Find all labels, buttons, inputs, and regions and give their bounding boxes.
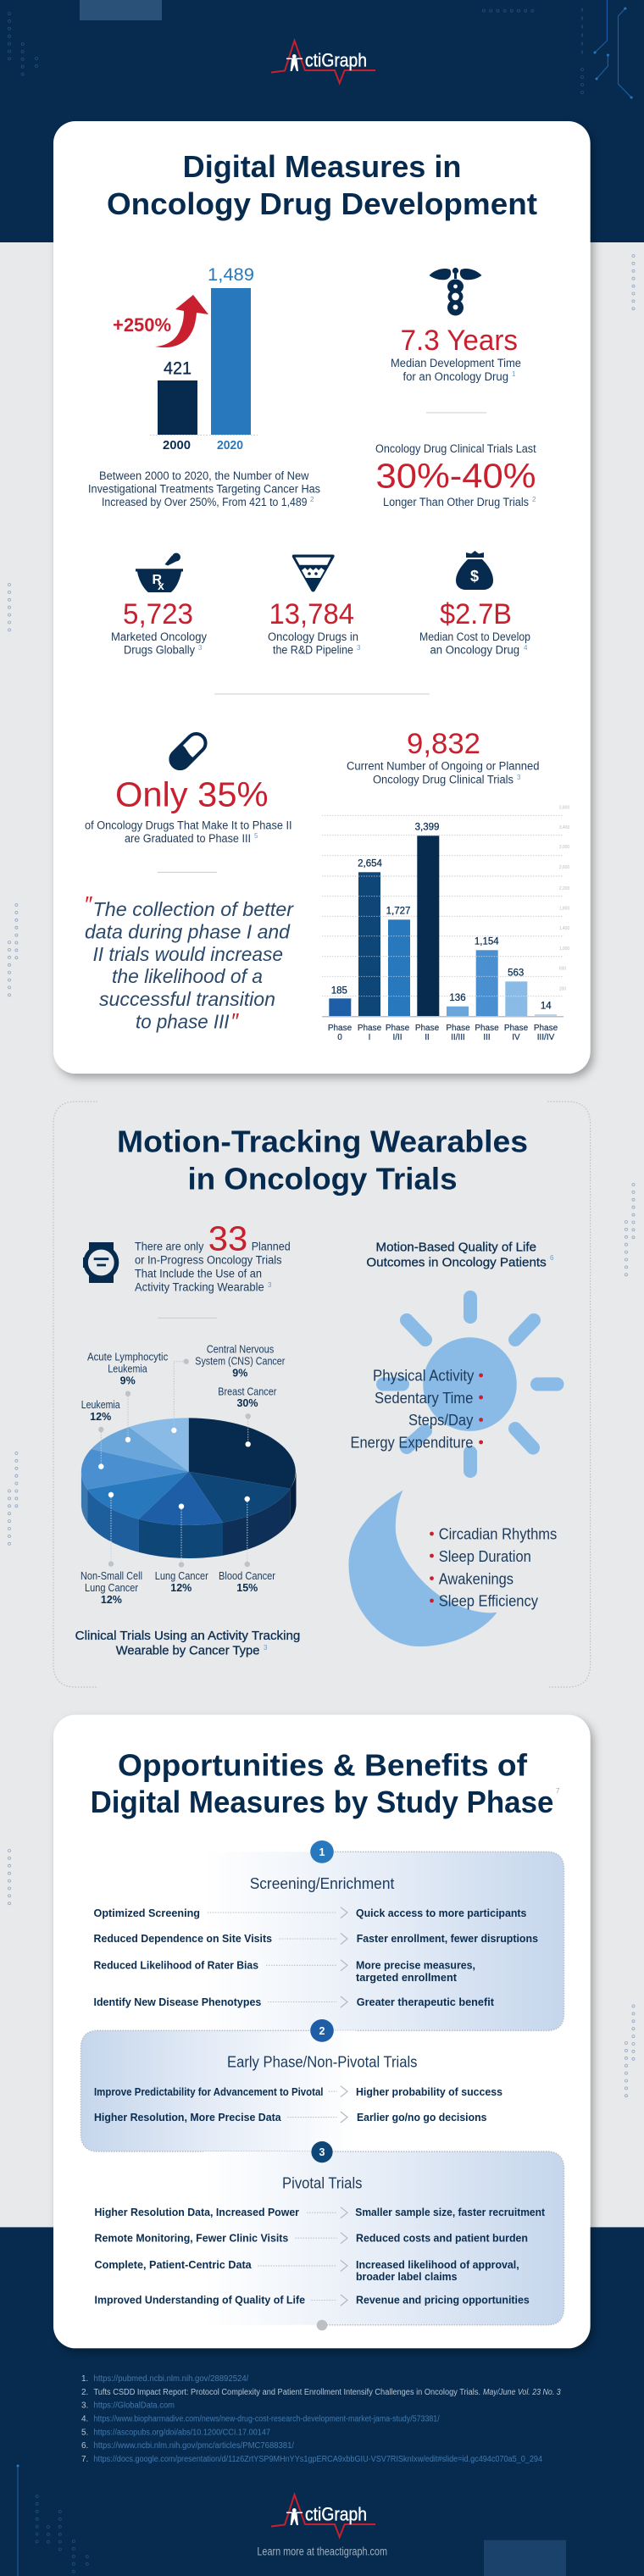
stat: 33 trials: That Include the Use of an	[135, 1268, 262, 1280]
stat: 7.3 years: for an Oncology Drug	[403, 370, 508, 383]
stat: R&D pipeline	[268, 598, 361, 656]
rows: pivotal benefits	[95, 2206, 546, 2306]
footer logo: ctiGraph	[305, 2504, 367, 2525]
stat: only 35%: Only 35%	[115, 774, 268, 813]
stat: 33 trials: Activity Tracking Wearable	[135, 1280, 264, 1293]
pie chart: cancer types: Leukemia	[108, 1363, 147, 1375]
list: daytime outcomes: Steps/Day	[408, 1411, 474, 1429]
list: sleep outcomes: Sleep Efficiency	[439, 1592, 539, 1610]
rows: pivotal benefits: Increased likelihood of approval,	[356, 2258, 519, 2271]
rows: screening benefits: Faster enrollment, fewer disruptions	[357, 1932, 538, 1945]
stat: only 35%: of Oncology Drugs That Make It to Phase II	[85, 819, 292, 831]
references: 2.	[81, 2388, 88, 2397]
pie chart: cancer types: Central Nervous	[207, 1344, 274, 1356]
chart caption: 3	[264, 1644, 268, 1652]
icon: wearable watch	[83, 1242, 117, 1283]
bar chart: trials by phase: 1,000	[559, 947, 569, 952]
bar chart: trials by phase: 563	[508, 969, 524, 979]
panel: pivotal trials	[95, 2141, 564, 2330]
bar chart: trials by phase: Phase	[446, 1024, 470, 1033]
pie chart: cancer types: 15%	[236, 1582, 258, 1594]
stat: 9,832 trials: 3	[517, 774, 521, 781]
title: motion-tracking	[117, 1124, 528, 1196]
references: 6.	[81, 2441, 88, 2451]
stat: median cost: $2.7B	[440, 598, 512, 630]
stat: 30%-40%: 30%-40%	[376, 456, 536, 495]
quote: data during phase I and	[85, 920, 291, 942]
stat: R&D pipeline: Oncology Drugs in	[268, 630, 358, 643]
references: 3.	[81, 2401, 88, 2411]
pie chart: cancer types: Blood Cancer	[219, 1570, 275, 1582]
references: Tufts CSDD Impact Report: Protocol Complexity and Patient Enrollment Intensify Challenges in Oncology Trials.	[93, 2388, 480, 2397]
stat: only 35%	[85, 774, 292, 845]
stat: 33 trials	[135, 1219, 291, 1293]
header logo	[271, 41, 375, 83]
rows: screening benefits: Optimized Screening	[93, 1907, 200, 1919]
footer link text: Learn more at theactigraph.com	[257, 2545, 387, 2557]
rows: screening benefits	[93, 1907, 538, 2008]
bar chart: trials by phase: Phase	[386, 1024, 410, 1033]
list: sleep outcomes	[430, 1525, 557, 1610]
stat: 30%-40%: Oncology Drug Clinical Trials Last	[375, 442, 536, 455]
heading: quality of life outcomes: Motion-Based Quality of Life	[376, 1240, 536, 1254]
stat: 7.3 years: 7.3 Years	[401, 325, 518, 357]
step number 1: 1	[319, 1846, 325, 1858]
bar chart: trials by phase: Phase	[358, 1024, 382, 1033]
bar chart: trials by phase: 1,727	[386, 906, 410, 916]
bar chart: trials by phase: 136	[449, 993, 466, 1003]
stat: marketed drugs: Drugs Globally	[124, 644, 195, 656]
icon: caduceus	[429, 268, 481, 315]
bar chart: trials by phase: 14	[541, 1002, 552, 1012]
panel: opportunities and benefits	[53, 1715, 591, 2348]
bar chart: trials by phase: 3,399	[415, 822, 439, 832]
pie chart: cancer types: 12%	[170, 1582, 192, 1594]
bar chart: 2000 vs 2020	[150, 265, 258, 452]
pie chart: cancer types: Breast Cancer	[218, 1386, 276, 1398]
title: opportunities: Digital Measures by Study Phase	[91, 1785, 553, 1819]
header logo: ctiGraph	[305, 50, 367, 71]
callout: +250%: +250%	[113, 314, 171, 336]
stat: 7.3 years: Median Development Time	[391, 357, 521, 369]
stat: marketed drugs: 5,723	[123, 598, 193, 630]
stat: 7.3 years: 1	[512, 370, 516, 378]
bar chart: trials by phase	[322, 805, 569, 1042]
references: https://www.ncbi.nlm.nih.gov/pmc/articles/PMC7688381/	[93, 2441, 294, 2451]
pie chart: cancer types: Lung Cancer	[85, 1582, 138, 1594]
bar chart: trials by phase: 600	[559, 966, 566, 971]
header band	[0, 0, 644, 242]
icon: moon	[348, 1491, 497, 1646]
bar chart: trials by phase: 200	[559, 986, 566, 991]
rows: early phase benefits: Improve Predictability for Advancement to Pivotal	[94, 2085, 324, 2098]
heading: early phase: Early Phase/Non-Pivotal Trials	[227, 2053, 417, 2071]
stat: marketed drugs	[111, 598, 207, 656]
bar chart: trials by phase: III	[483, 1033, 491, 1042]
stat: 33 trials: 3	[268, 1281, 272, 1289]
rows: pivotal benefits: Revenue and pricing opportunities	[356, 2293, 530, 2306]
stat: 33 trials: or In-Progress Oncology Trials	[135, 1254, 282, 1267]
stat: only 35%: are Graduated to Phase III	[125, 832, 251, 845]
step number 1	[310, 1840, 334, 1863]
bar chart: 2000 vs 2020: 1,489	[208, 265, 254, 285]
bar chart: 2000 vs 2020: 421	[164, 359, 192, 379]
step number 2: 2	[319, 2025, 325, 2037]
bar chart: trials by phase: Phase	[415, 1024, 440, 1033]
pie chart: cancer types: 12%	[90, 1411, 111, 1423]
title: digital measures: Digital Measures in	[183, 149, 461, 184]
title: motion-tracking: in Oncology Trials	[188, 1162, 458, 1196]
icon: pill	[164, 729, 211, 774]
step number 3: 3	[319, 2146, 325, 2158]
references: https://pubmed.ncbi.nlm.nih.gov/28892524/	[93, 2374, 249, 2384]
bar chart: trials by phase: 185	[331, 985, 347, 996]
list: daytime outcomes	[351, 1367, 483, 1452]
bar chart: trials by phase: 0	[337, 1033, 342, 1042]
stat: 33 trials: There are only	[135, 1241, 204, 1252]
footer band	[0, 2227, 644, 2576]
bar chart: trials by phase: III/IV	[537, 1033, 555, 1042]
pie chart: cancer types	[80, 1344, 297, 1606]
rows: screening benefits: Identify New Disease Phenotypes	[93, 1996, 261, 2008]
pie chart: cancer types: 30%	[236, 1397, 258, 1409]
pie chart: cancer types: 9%	[120, 1374, 136, 1386]
rows: pivotal benefits: Smaller sample size, faster recruitment	[355, 2206, 546, 2218]
references: 1.	[81, 2374, 88, 2384]
quote	[84, 891, 294, 1034]
bar chart: trials by phase: II/III	[451, 1033, 465, 1042]
stat: 7.3 years	[391, 325, 521, 383]
pie chart: cancer types: Non-Small Cell	[80, 1570, 142, 1582]
bar chart: 2000 vs 2020: 2020	[217, 439, 243, 452]
stat: median cost: an Oncology Drug	[430, 644, 519, 656]
title: digital measures	[107, 149, 537, 221]
list: sleep outcomes: Circadian Rhythms	[439, 1525, 557, 1543]
icon: money bag	[456, 551, 493, 590]
stat: 9,832 trials	[347, 728, 539, 786]
title: opportunities: 7	[556, 1787, 560, 1795]
chart caption: Clinical Trials Using an Activity Tracking	[75, 1629, 300, 1643]
bar chart: trials by phase: 1,400	[559, 926, 569, 931]
title: opportunities	[91, 1747, 560, 1819]
stat: 9,832 trials: Current Number of Ongoing or Planned	[347, 760, 539, 773]
heading: pivotal: Pivotal Trials	[282, 2174, 363, 2192]
rows: pivotal benefits: Reduced costs and patient burden	[356, 2231, 528, 2244]
quote: The collection of better	[93, 898, 294, 920]
heading: screening: Screening/Enrichment	[250, 1874, 394, 1892]
bar chart: trials by phase: II	[425, 1033, 430, 1042]
rows: screening benefits: Quick access to more participants	[356, 1907, 526, 1919]
title: motion-tracking: Motion-Tracking Wearables	[117, 1124, 528, 1159]
chart caption: Wearable by Cancer Type	[116, 1643, 259, 1657]
references: 4.	[81, 2414, 88, 2423]
references: 5.	[81, 2428, 88, 2437]
step number 2	[310, 2019, 334, 2042]
bar chart: trials by phase: 3,000	[559, 845, 569, 850]
heading: quality of life outcomes	[366, 1240, 554, 1269]
quote: ″	[84, 891, 92, 917]
references: https://ascopubs.org/doi/abs/10.1200/CCI.17.00147	[93, 2428, 270, 2437]
quote: ″	[230, 1008, 239, 1034]
bar chart: trials by phase: 2,200	[559, 886, 569, 891]
quote: to phase III	[136, 1010, 230, 1032]
bar chart: 2000 vs 2020: 2000	[163, 439, 191, 452]
pie chart: cancer types: Acute Lymphocytic	[87, 1352, 168, 1363]
end marker	[317, 2320, 327, 2330]
list: daytime outcomes: Physical Activity	[373, 1367, 475, 1385]
chart caption	[75, 1629, 300, 1657]
rows: screening benefits: targeted enrollment	[356, 1971, 458, 1984]
stat: 9,832 trials: 9,832	[407, 728, 480, 760]
rows: early phase benefits: Earlier go/no go decisions	[357, 2111, 486, 2124]
rows: screening benefits: Reduced Dependence on Site Visits	[93, 1932, 272, 1945]
list: sleep outcomes: Sleep Duration	[439, 1547, 531, 1565]
references: https://GlobalData.com	[93, 2401, 175, 2411]
quote: II trials would increase	[93, 943, 283, 965]
panel: oncology drug development	[53, 121, 591, 1074]
stat: R&D pipeline: 13,784	[269, 598, 354, 630]
stat: only 35%: 5	[254, 832, 258, 840]
bar chart: trials by phase: I	[369, 1033, 370, 1042]
references: 7.	[81, 2455, 88, 2464]
pie chart: cancer types: 12%	[101, 1594, 122, 1606]
stat: median cost	[419, 598, 530, 656]
rows: pivotal benefits: Improved Understanding of Quality of Life	[95, 2293, 305, 2306]
rows: screening benefits: Greater therapeutic benefit	[357, 1996, 495, 2008]
rows: early phase benefits: Higher probability of success	[356, 2085, 502, 2098]
icon: funnel	[292, 554, 335, 591]
list: daytime outcomes: Sedentary Time	[375, 1389, 473, 1407]
stat: median cost: Median Cost to Develop	[419, 630, 530, 643]
step number 3	[311, 2141, 333, 2162]
bar chart: trials by phase: Phase	[328, 1024, 353, 1033]
arrow: growth	[155, 295, 208, 347]
footer logo	[271, 2495, 375, 2537]
stat: 33 trials: Planned	[252, 1241, 291, 1252]
title: opportunities: Opportunities & Benefits of	[118, 1747, 528, 1782]
stat: 33 trials: 33	[208, 1219, 247, 1257]
list: sleep outcomes: Awakenings	[439, 1569, 514, 1587]
bar chart: trials by phase: Phase	[475, 1024, 499, 1033]
rows: pivotal benefits: Remote Monitoring, Fewer Clinic Visits	[95, 2231, 288, 2244]
quote: successful transition	[99, 988, 275, 1010]
bar chart: trials by phase: 3,800	[559, 805, 569, 810]
list: daytime outcomes: Energy Expenditure	[351, 1434, 473, 1452]
pie chart: cancer types: Lung Cancer	[155, 1570, 208, 1582]
heading: quality of life outcomes: Outcomes in Oncology Patients	[366, 1255, 547, 1269]
bar chart: trials by phase: 2,654	[358, 858, 382, 869]
stat: 30%-40%	[375, 442, 536, 508]
stat: R&D pipeline: the R&D Pipeline	[273, 644, 353, 656]
panel: early phase	[81, 2019, 502, 2151]
text: treatments growth: 2	[310, 496, 314, 503]
rows: early phase benefits: Higher Resolution, More Precise Data	[94, 2111, 281, 2124]
text: treatments growth: Investigational Treatments Targeting Cancer Has	[88, 483, 320, 496]
stat: marketed drugs: 3	[198, 644, 203, 652]
bar chart: trials by phase: 3,400	[559, 825, 569, 830]
bar chart: trials by phase: Phase	[534, 1024, 558, 1033]
icon: mortar and pestle: x	[158, 579, 164, 592]
text: treatments growth: Between 2000 to 2020, the Number of New	[99, 469, 309, 482]
quote: the likelihood of a	[112, 965, 263, 987]
title: digital measures: Oncology Drug Development	[107, 186, 537, 221]
rows: pivotal benefits: broader label claims	[356, 2270, 458, 2283]
bar chart: trials by phase: 1,800	[559, 907, 569, 912]
icon: money bag: $	[470, 568, 479, 585]
bar chart: trials by phase: 1,154	[475, 937, 499, 947]
stat: median cost: 4	[524, 644, 528, 652]
stat: 9,832 trials: Oncology Drug Clinical Trials	[373, 773, 514, 786]
stat: marketed drugs: Marketed Oncology	[111, 630, 207, 643]
text: treatments growth	[88, 469, 320, 508]
pie chart: cancer types: System (CNS) Cancer	[195, 1356, 285, 1368]
rows: pivotal benefits: Complete, Patient-Centric Data	[95, 2258, 252, 2271]
rows: early phase benefits	[94, 2085, 502, 2124]
rows: pivotal benefits: Higher Resolution Data, Increased Power	[95, 2206, 299, 2218]
references: https://docs.google.com/presentation/d/11z6ZrtYSP9MHnYYs1gpERCA9xbbGIU-VSV7RISknIxw/edit#slide=id.gc494c070a5_0_294	[93, 2455, 542, 2464]
rows: screening benefits: Reduced Likelihood of Rater Bias	[93, 1959, 258, 1972]
panel: screening/enrichment	[93, 1840, 564, 2030]
references: https://www.biopharmadive.com/news/new-drug-cost-research-development-market-jama-study/573381/	[93, 2414, 440, 2423]
rows: screening benefits: More precise measures,	[356, 1959, 475, 1972]
icon: mortar and pestle	[136, 552, 183, 592]
icon: mortar and pestle: R	[153, 573, 163, 587]
stat: 30%-40%: 2	[532, 496, 536, 503]
bar chart: trials by phase: IV	[512, 1033, 520, 1042]
panel: motion-tracking wearables	[53, 1102, 591, 1687]
bar chart: trials by phase: Phase	[504, 1024, 529, 1033]
references	[81, 2374, 561, 2464]
bar chart: trials by phase: I/II	[392, 1033, 402, 1042]
pie chart: cancer types: Leukemia	[81, 1399, 120, 1411]
text: treatments growth: Increased by Over 250%, From 421 to 1,489	[102, 496, 307, 508]
stat: R&D pipeline: 3	[357, 644, 361, 652]
stat: 30%-40%: Longer Than Other Drug Trials	[383, 496, 529, 508]
pie chart: cancer types: 9%	[232, 1367, 247, 1379]
heading: quality of life outcomes: 6	[550, 1254, 554, 1262]
references: May/June Vol. 23 No. 3	[483, 2388, 561, 2397]
icon: sun	[383, 1297, 558, 1471]
bar chart: trials by phase: 2,600	[559, 865, 569, 870]
